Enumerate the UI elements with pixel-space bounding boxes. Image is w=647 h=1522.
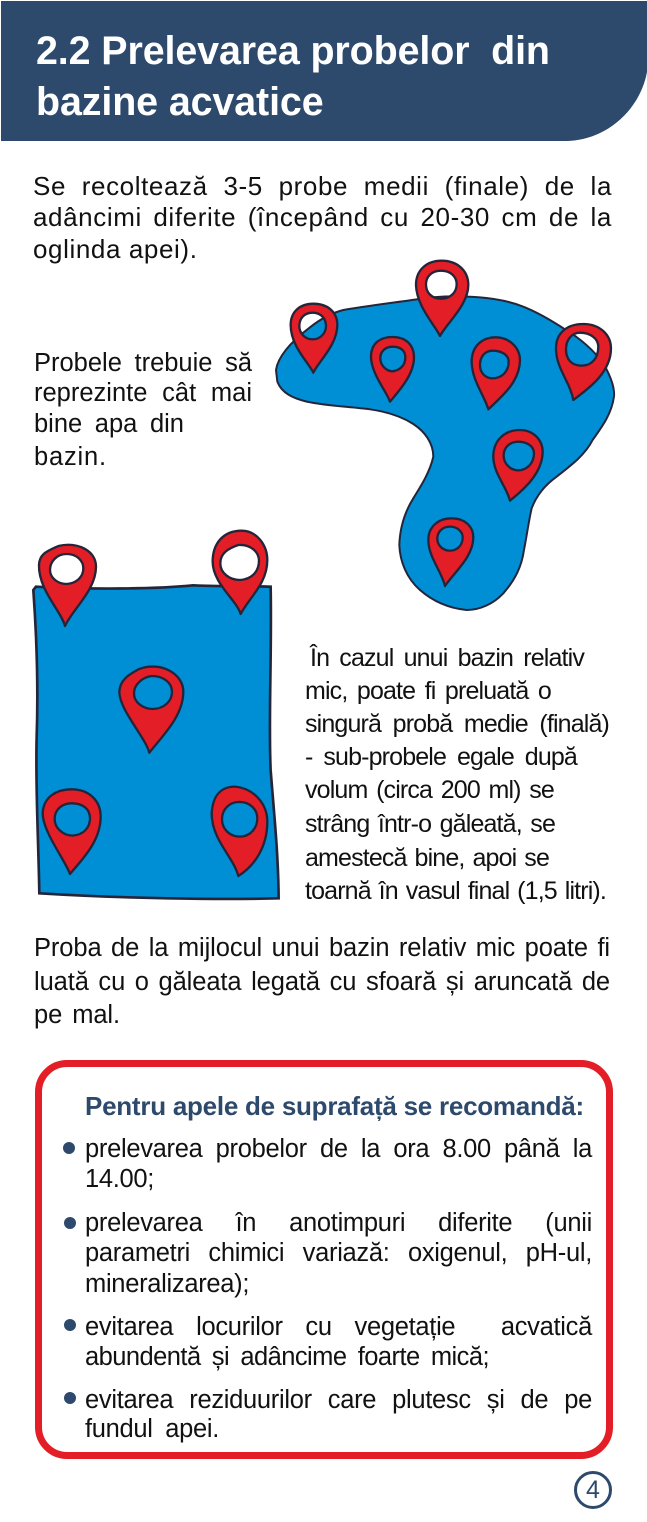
paragraph: small basin composite sample: strâng într-o găleată, se	[305, 810, 555, 838]
recommendation 4	[64, 1386, 592, 1443]
recommendation 2: prelevarea în anotimpuri diferite (unii	[85, 1209, 592, 1237]
paragraph: small basin composite sample: singură probă medie (finală)	[305, 710, 609, 738]
pin 4	[472, 337, 520, 409]
paragraph: small basin composite sample	[305, 644, 609, 905]
recommendation 1: prelevarea probelor de la ora 8.00 până la	[85, 1135, 592, 1163]
page number	[574, 1471, 612, 1509]
paragraph: sampling from the middle with a bucket: Proba de la mijlocul unui bazin relativ mic poate fi	[34, 934, 610, 962]
pin c	[119, 667, 183, 753]
side note: representative samples: reprezinte cât mai	[34, 379, 252, 407]
pond shape	[33, 585, 279, 899]
pin a	[39, 545, 96, 626]
paragraph: sampling from the middle with a bucket: pe mal.	[34, 1001, 120, 1029]
paragraph: small basin composite sample: volum (circa 200 ml) se	[305, 776, 554, 804]
paragraph: sampling from the middle with a bucket	[34, 934, 610, 1029]
bullet	[64, 1392, 76, 1404]
intro text: oglinda apei).	[33, 234, 198, 264]
lake illustration with sampling pins	[275, 260, 616, 611]
bullet	[64, 1217, 76, 1229]
pin 6	[493, 430, 543, 501]
side note: representative samples: bazin.	[34, 443, 107, 471]
pin b	[213, 531, 267, 614]
pin e	[212, 787, 267, 876]
bullet	[64, 1319, 76, 1331]
panel heading: Pentru apele de suprafață se recomandă:	[85, 1091, 584, 1121]
intro text	[33, 171, 612, 264]
paragraph: small basin composite sample: amestecă bine, apoi se	[305, 844, 549, 872]
recommendation 3: abundentă și adâncime foarte mică;	[85, 1343, 489, 1371]
recommendation 4: evitarea reziduurilor care plutesc și de pe	[85, 1386, 592, 1414]
paragraph: small basin composite sample: mic, poate fi preluată o	[305, 677, 551, 705]
recommendation 2: mineralizarea);	[85, 1270, 249, 1298]
recommendation 1	[63, 1135, 592, 1193]
pin 5	[556, 324, 611, 400]
side note: representative samples	[34, 349, 252, 471]
paragraph: small basin composite sample: toarnă în vasul final (1,5 litri).	[305, 877, 606, 905]
recommendation 2: parametri chimici variază: oxigenul, pH-ul,	[85, 1239, 592, 1267]
recommendation 3	[64, 1313, 592, 1371]
title: 2.2 Prelevarea probelor din bazine acvatice	[36, 29, 550, 124]
recommendation 2	[64, 1209, 592, 1298]
page number: 4	[586, 1476, 600, 1504]
paragraph: sampling from the middle with a bucket: luată cu o găleata legată cu sfoară și aruncată de	[34, 968, 610, 996]
bullet	[63, 1142, 75, 1154]
pin 1	[291, 304, 337, 373]
intro text: adâncimi diferite (începând cu 20-30 cm de la	[33, 202, 612, 232]
lake shape	[276, 296, 614, 610]
recommendation 1: 14.00;	[85, 1165, 154, 1193]
intro text: Se recoltează 3-5 probe medii (finale) de la	[33, 171, 612, 201]
header banner	[1, 1, 647, 141]
recommendation 3: evitarea locurilor cu vegetație acvatică	[85, 1313, 592, 1341]
panel: surface water recommendations	[35, 1060, 613, 1459]
pin 2	[371, 337, 414, 402]
pin d	[43, 789, 101, 874]
recommendation 4: fundul apei.	[85, 1415, 219, 1443]
paragraph: small basin composite sample: În cazul unui bazin relativ	[310, 644, 584, 672]
paragraph: small basin composite sample: - sub-probele egale după	[305, 743, 577, 771]
side note: representative samples: Probele trebuie să	[34, 349, 252, 377]
side note: representative samples: bine apa din	[34, 410, 184, 438]
pin 7	[428, 518, 473, 586]
rectangular pond illustration with sampling pins	[32, 530, 280, 900]
pin 3	[416, 261, 468, 336]
